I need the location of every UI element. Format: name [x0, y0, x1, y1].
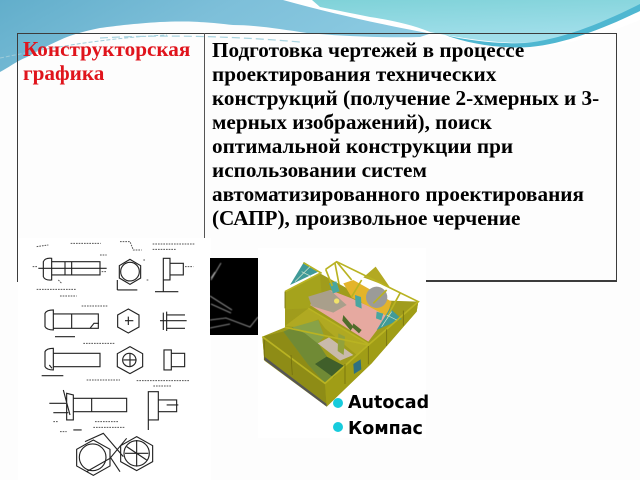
- bullet: Autocad: [333, 398, 343, 408]
- heading: term: Конструкторская: [23, 37, 190, 61]
- text block: description: (САПР), произвольное черчение: [212, 206, 520, 230]
- text block: description: мерных изображений), поиск: [212, 110, 492, 134]
- text block: description: Подготовка чертежей в процессе: [212, 38, 524, 62]
- text block: description: автоматизированного проектирования: [212, 182, 584, 206]
- image: black CAD screenshot: [210, 258, 258, 335]
- text block: description: проектирования технических: [212, 62, 496, 86]
- text block: description: использовании систем: [212, 158, 427, 182]
- heading: term: [23, 37, 190, 85]
- label: Компас: Компас: [348, 419, 423, 439]
- heading: term: графика: [23, 61, 104, 85]
- bullet: Компас: [333, 422, 343, 432]
- table panel: [17, 33, 617, 282]
- table column divider: [204, 33, 205, 238]
- text block: description: [212, 38, 599, 230]
- label: Autocad: Autocad: [348, 393, 429, 413]
- list: software: [333, 393, 429, 439]
- text block: description: конструкций (получение 2-хмерных и 3-: [212, 86, 599, 110]
- image: bolt technical drawing: [18, 241, 210, 476]
- image: 3D house model: [258, 260, 426, 407]
- text block: description: оптимальной конструкции при: [212, 134, 513, 158]
